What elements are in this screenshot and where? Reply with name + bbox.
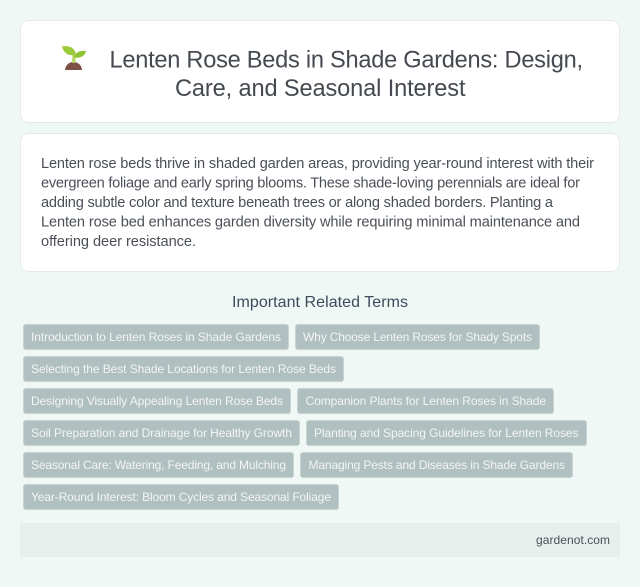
tag: Companion Plants for Lenten Roses in Shade [306, 394, 546, 408]
description line 1: Lenten rose beds thrive in shaded garden areas, providing year-round interest with their [41, 156, 594, 172]
panel: description [20, 134, 620, 272]
heading: important related terms: Important Related Terms [232, 294, 408, 311]
icon: sprout seedling [62, 46, 86, 70]
tag [24, 484, 338, 510]
description line 3: adding subtle color and texture beneath trees or along shaded borders. Planting a [41, 195, 554, 211]
description line 5: offering deer resistance. [41, 234, 196, 250]
tag [24, 452, 294, 478]
title line 1: Lenten Rose Beds in Shade Gardens: Design, [110, 48, 583, 74]
tag: Designing Visually Appealing Lenten Rose Beds [31, 394, 283, 408]
tag group: related terms [24, 324, 586, 510]
tag [24, 324, 288, 350]
tag [298, 388, 554, 414]
tag [296, 324, 540, 350]
tag [306, 420, 586, 446]
footer bar [20, 523, 620, 557]
tag: Planting and Spacing Guidelines for Lenten Roses [314, 426, 578, 440]
tag: Why Choose Lenten Roses for Shady Spots [303, 330, 532, 344]
tag: Seasonal Care: Watering, Feeding, and Mulching [31, 458, 286, 472]
description line 2: evergreen foliage and early spring blooms. These shade-loving perennials are ideal for [41, 176, 580, 192]
footer source text: gardenot.com [536, 533, 610, 547]
tag [24, 420, 300, 446]
tag [300, 452, 572, 478]
description line 4: Lenten rose bed enhances garden diversity while requiring minimal maintenance and [41, 214, 580, 230]
tag: Selecting the Best Shade Locations for Lenten Rose Beds [31, 362, 336, 376]
tag: Soil Preparation and Drainage for Healthy Growth [31, 426, 292, 440]
tag [24, 356, 344, 382]
tag: Managing Pests and Diseases in Shade Gardens [308, 458, 565, 472]
tag [24, 388, 290, 414]
tag: Year-Round Interest: Bloom Cycles and Seasonal Foliage [31, 490, 331, 504]
panel: title card [20, 20, 620, 122]
title line 2: Care, and Seasonal Interest [175, 76, 466, 102]
tag: Introduction to Lenten Roses in Shade Gardens [31, 330, 281, 344]
